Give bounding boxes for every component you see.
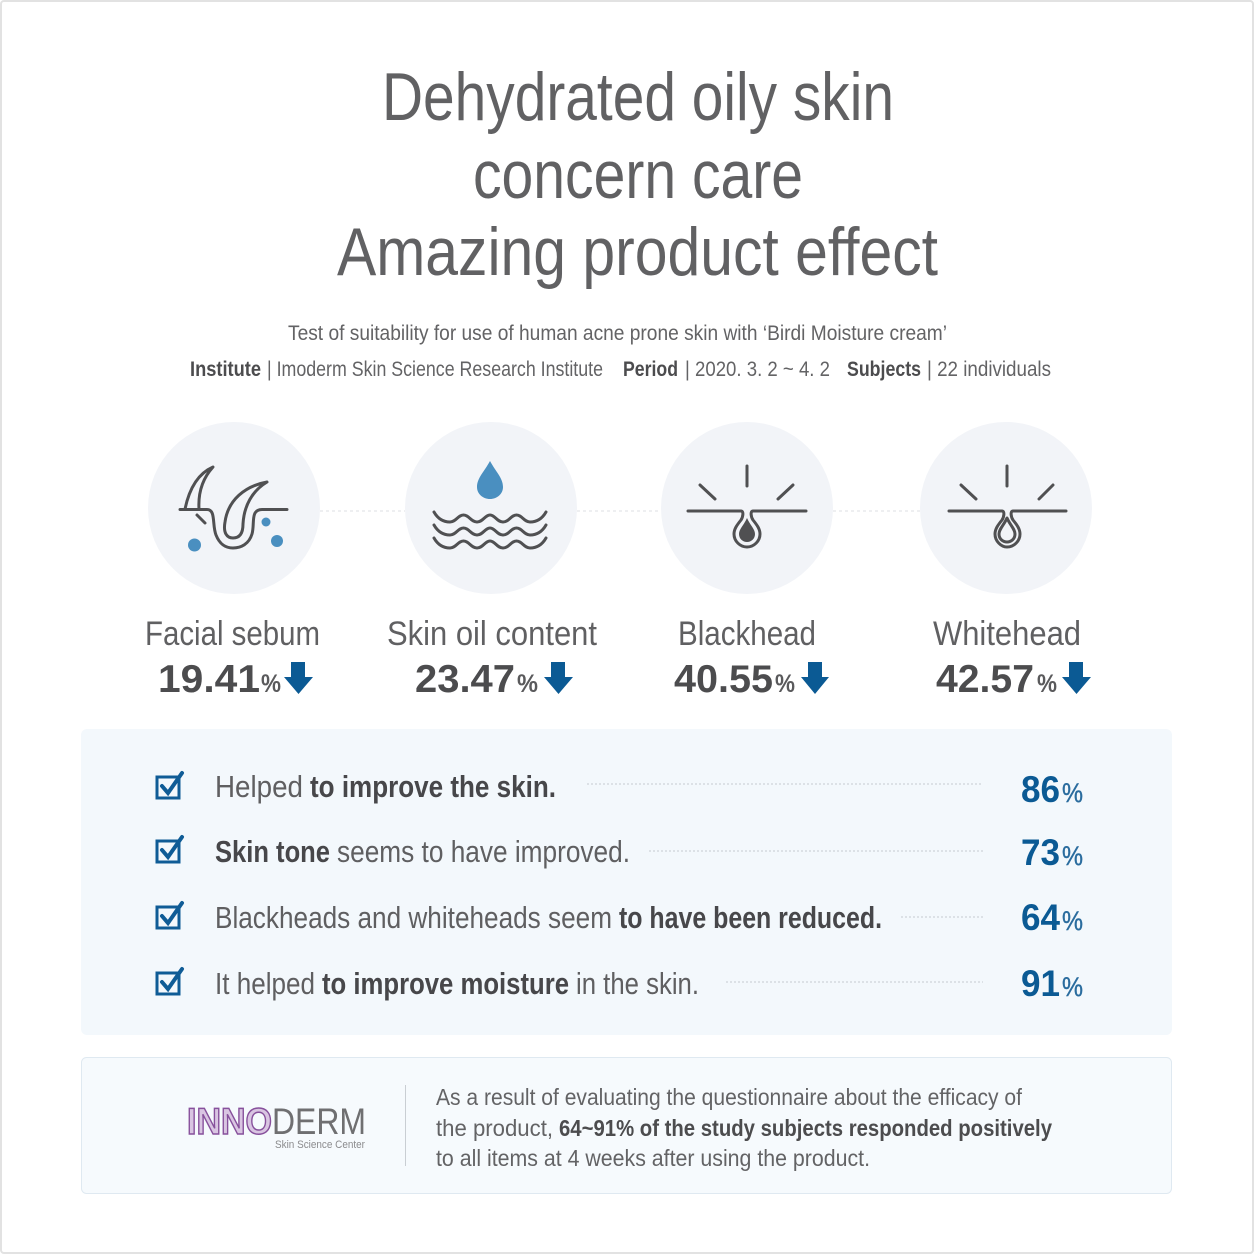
conclusion text xyxy=(436,1084,1052,1171)
panel: survey results xyxy=(81,729,1172,1035)
value xyxy=(158,658,313,701)
study details: | Imoderm Skin Science Research Institute xyxy=(267,358,603,381)
title: concern care xyxy=(473,137,803,213)
study details: Subjects xyxy=(847,358,921,381)
row: blackheads and whiteheads xyxy=(157,897,1083,938)
row: improve the skin: to improve the skin. xyxy=(310,769,556,804)
value: 19.41 xyxy=(158,658,260,701)
study details: Period xyxy=(623,358,678,381)
panel: facial sebum xyxy=(145,422,320,701)
logo: Innoderm: Skin Science Center xyxy=(275,1139,365,1151)
subtitle: test description: Test of suitability for use of human acne prone skin with ‘Birdi Moisture cream’ xyxy=(288,322,947,345)
row: blackheads and whiteheads: Blackheads and whiteheads seem xyxy=(215,900,612,935)
logo: Innoderm: INNO xyxy=(187,1101,272,1142)
row: skin tone: % xyxy=(1062,841,1083,871)
row: improve the skin xyxy=(157,769,1083,810)
conclusion text: to all items at 4 weeks after using the product. xyxy=(436,1145,870,1171)
title xyxy=(337,59,938,290)
row: moisture: It helped xyxy=(215,966,315,1001)
icon: hair follicle with sebum dots xyxy=(148,422,320,594)
title: Dehydrated oily skin xyxy=(382,59,894,135)
row: moisture xyxy=(157,963,1083,1004)
row: blackheads and whiteheads: % xyxy=(1062,906,1083,936)
row: skin tone: seems to have improved. xyxy=(337,834,630,869)
row: improve the skin: Helped xyxy=(215,769,303,804)
row: improve the skin: % xyxy=(1062,778,1083,808)
study details: | 2020. 3. 2 ~ 4. 2 xyxy=(685,358,830,381)
label: Facial sebum xyxy=(145,615,320,653)
row: moisture: 91 xyxy=(1021,963,1060,1004)
conclusion text: 64~91% of the study subjects responded positively xyxy=(559,1115,1052,1141)
row: improve the skin: 86 xyxy=(1021,769,1060,810)
label: Skin oil content xyxy=(387,615,597,653)
row: moisture: in the skin. xyxy=(576,966,699,1001)
icon: clogged pore, dark xyxy=(661,422,833,594)
row: skin tone: 73 xyxy=(1021,832,1060,873)
value: % xyxy=(775,670,795,698)
value: % xyxy=(261,670,281,698)
row: blackheads and whiteheads: to have been reduced. xyxy=(619,900,882,935)
value: % xyxy=(1037,670,1057,698)
value: % xyxy=(517,670,538,698)
panel: whitehead xyxy=(920,422,1092,701)
row: moisture: % xyxy=(1062,972,1083,1002)
title: Amazing product effect xyxy=(337,214,938,290)
study details: Institute xyxy=(190,358,261,381)
conclusion text: As a result of evaluating the questionnaire about the efficacy of xyxy=(436,1084,1023,1110)
label: Blackhead xyxy=(678,615,816,653)
logo: Innoderm: DERM xyxy=(272,1101,366,1142)
icon: water drop and waves xyxy=(405,422,577,594)
value: 40.55 xyxy=(674,658,773,701)
value: 42.57 xyxy=(936,658,1034,701)
panel: blackhead xyxy=(661,422,833,701)
panel: conclusion xyxy=(82,1058,1172,1194)
panel: skin oil content xyxy=(387,422,597,701)
value: 23.47 xyxy=(415,658,515,701)
label: Whitehead xyxy=(933,615,1081,653)
study details xyxy=(190,358,1051,381)
value xyxy=(936,658,1091,701)
study details: | 22 individuals xyxy=(927,358,1051,381)
row: blackheads and whiteheads: 64 xyxy=(1021,897,1060,938)
row: skin tone: Skin tone xyxy=(215,834,330,869)
conclusion text: the product, xyxy=(436,1115,553,1141)
row: skin tone xyxy=(157,832,1083,873)
value xyxy=(415,658,573,701)
row: moisture: to improve moisture xyxy=(322,966,569,1001)
logo: Innoderm xyxy=(187,1101,366,1151)
icon: clogged pore, hollow xyxy=(920,422,1092,594)
value xyxy=(674,658,829,701)
